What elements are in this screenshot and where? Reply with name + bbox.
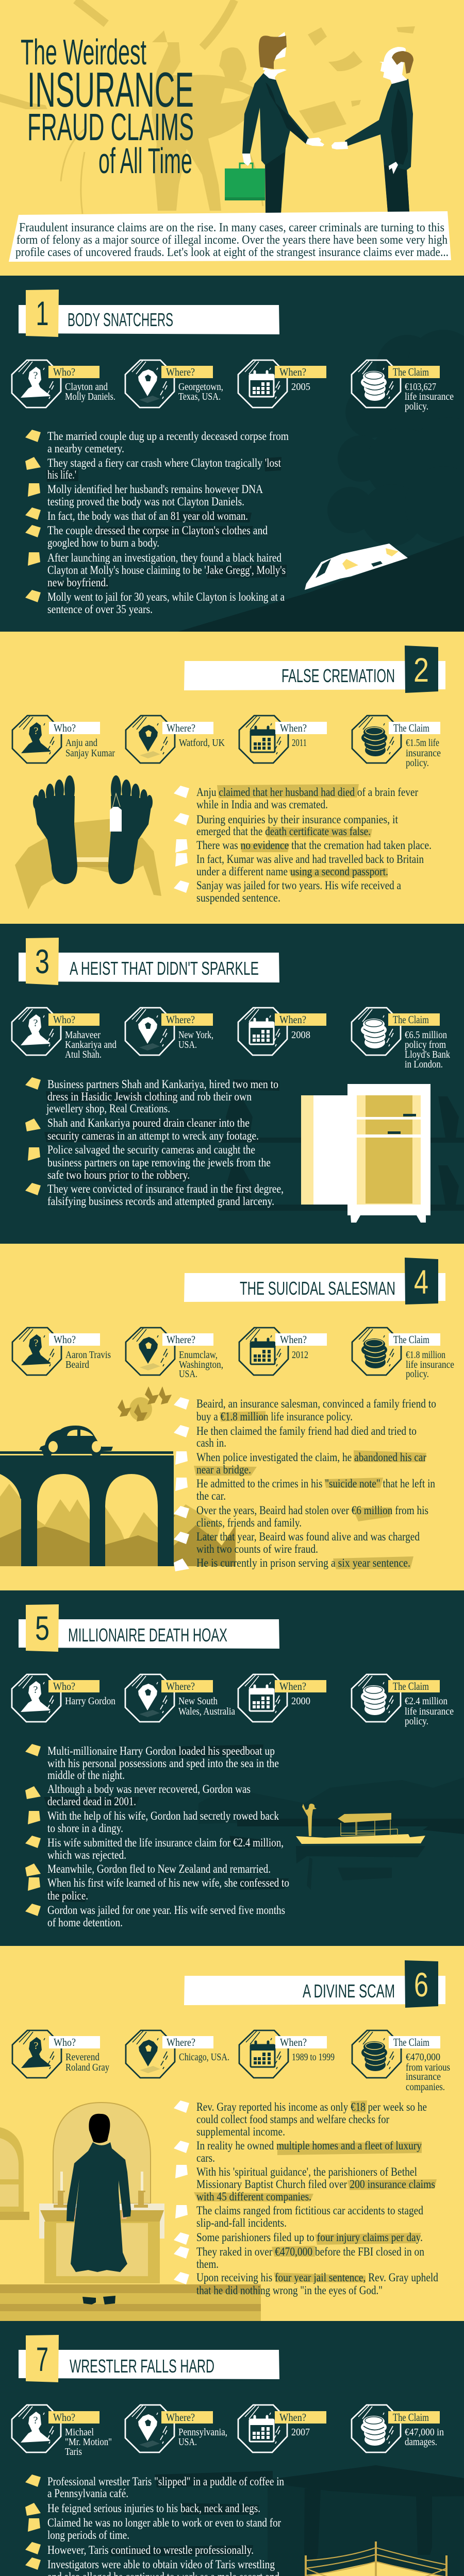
fact row: who where when claim: life insurance [405, 391, 454, 402]
section heading: BODY SNATCHERS [68, 309, 173, 330]
story bullets: However, Taris continued to wrestle professionally. [47, 2544, 254, 2556]
fact row: who where when claim: Watford, UK [179, 737, 225, 749]
story bullets: while in India and was cremated. [196, 798, 328, 811]
fact row: who where when claim: The Claim [393, 2411, 429, 2424]
fact row: who where when claim [12, 1008, 450, 1070]
story bullets: his life.' [47, 468, 76, 481]
fact row: who where when claim: When? [279, 366, 306, 378]
fact row: who where when claim: €6.5 million [405, 1029, 447, 1041]
story bullets: slip-and-fall incidents. [196, 2216, 287, 2229]
story bullets: declared dead in 2001. [47, 1795, 136, 1808]
story bullets: He is currently in prison serving a six year sentence. [196, 1556, 410, 1569]
story bullets: the car. [196, 1489, 226, 1502]
fact row: who where when claim: €47,000 in [405, 2427, 444, 2438]
fact row: who where when claim: The Claim [393, 722, 429, 734]
section heading [19, 1604, 279, 1652]
story bullets: sentence of over 35 years. [47, 603, 153, 616]
fact row: who where when claim: Who? [53, 366, 75, 378]
panel: 7 wrestler falls hard [0, 2321, 464, 2576]
fact row: who where when claim: 1989 to 1999 [292, 2052, 335, 2063]
intro text box [9, 211, 451, 262]
story bullets: Police salvaged the security cameras and caught the [47, 1143, 255, 1156]
fact row: who where when claim: 2012 [292, 1349, 308, 1361]
story bullets: with 45 different companies. [196, 2190, 311, 2203]
fact row: who where when claim: When? [279, 1013, 306, 1026]
fact row: who where when claim: Atul Shah. [65, 1049, 102, 1060]
fact row: who where when claim [12, 1328, 454, 1380]
story bullets [174, 784, 432, 904]
fact row: who where when claim: insurance [406, 2071, 441, 2082]
fact row: who where when claim: Where? [166, 2411, 195, 2424]
fact row: who where when claim: New South [178, 1696, 218, 1707]
story bullets: Professional wrestler Taris "slipped" in a puddle of coffee in [47, 2475, 284, 2488]
story bullets: security cameras in an attempt to wreck any footage. [47, 1129, 259, 1142]
fact row: who where when claim: Michael [65, 2427, 94, 2438]
section heading [19, 2335, 279, 2382]
fact row: who where when claim: Anju and [65, 737, 97, 749]
panel: hero header [0, 0, 464, 276]
fact row: who where when claim: Where? [166, 1680, 195, 1692]
fact row: who where when claim: "Mr. Motion" [65, 2436, 112, 2448]
story bullets: falsifying business records and attempted grand larceny. [47, 1195, 274, 1208]
story bullets: with his personal possessions and sped into the sea in the [47, 1757, 279, 1770]
story bullets: The married couple dug up a recently deceased corpse from [47, 430, 289, 443]
fact row: who where when claim: The Claim [393, 366, 429, 378]
fact row: who where when claim: When? [280, 1333, 307, 1346]
fact row: who where when claim: The Claim [393, 2036, 429, 2048]
story bullets: clients, friends and family. [196, 1516, 302, 1529]
section heading: 3 [35, 942, 49, 980]
fact row: who where when claim [12, 2405, 444, 2458]
story bullets [25, 1744, 289, 1929]
story bullets: With the help of his wife, Gordon had secretly rowed back [47, 1809, 279, 1822]
illustration: wrestling ring [268, 2465, 464, 2576]
fact row: who where when claim: Clayton and [65, 381, 108, 393]
panel: 4 the suicidal salesman [0, 1244, 464, 1590]
story bullets: Clayton at Molly's house claiming to be 'Jake Gregg', Molly's [47, 564, 286, 577]
fact row: who where when claim: Taris [65, 2446, 82, 2458]
fact row: who where when claim: from various [406, 2062, 450, 2073]
panel: 1 body snatchers [0, 276, 464, 632]
panel: 3 a heist that didn't sparkle [0, 924, 464, 1244]
story bullets: He then claimed the family friend had died and tried to [196, 1425, 417, 1437]
fact row: who where when claim: Beaird [65, 1359, 89, 1370]
story bullets: with two counts of wire fraud. [196, 1543, 318, 1555]
fact row: who where when claim: 2007 [291, 2427, 310, 2438]
fact row: who where when claim: New York, [178, 1029, 213, 1041]
story bullets: dress in Hasidic Jewish clothing and rob their own [47, 1090, 252, 1103]
fact row: who where when claim: USA. [178, 2436, 197, 2448]
fact row: who where when claim: Washington, [179, 1359, 223, 1370]
fact row: who where when claim: Pennsylvania, [178, 2427, 227, 2438]
story bullets: that he did nothing wrong "in the eyes of God." [196, 2284, 383, 2297]
story bullets: Molly identified her husband's remains however DNA [47, 483, 263, 496]
story bullets: In fact, Kumar was alive and had travelled back to Britain [196, 853, 424, 866]
section heading [184, 646, 445, 693]
panel: 6 a divine scam [0, 1946, 464, 2321]
fact row: who where when claim: Who? [54, 2036, 76, 2048]
fact row: who where when claim: ? [34, 2040, 39, 2052]
panel: 5 millionaire death hoax [0, 1590, 464, 1946]
section heading: 6 [414, 1965, 428, 2004]
fact row: who where when claim: ? [34, 1337, 39, 1349]
fact row: who where when claim: €103,627 [405, 381, 436, 393]
story bullets [25, 1077, 284, 1208]
fact row: who where when claim: Who? [54, 1333, 76, 1346]
title: The Weirdest [21, 32, 146, 72]
section heading: 1 [36, 294, 48, 332]
story bullets: Multi-millionaire Harry Gordon loaded his speedboat up [47, 1744, 275, 1757]
fact row: who where when claim: ? [34, 2415, 38, 2426]
fact row: who where when claim: insurance [406, 748, 441, 759]
title: of All Time [98, 141, 192, 181]
story bullets: In fact, the body was that of an 81 year old woman. [47, 510, 248, 522]
hero shadow illustration [0, 0, 415, 214]
story bullets: When police investigated the claim, he abandoned his car [196, 1451, 426, 1464]
section heading: WRESTLER FALLS HARD [70, 2355, 214, 2377]
fact row: who where when claim: Aaron Travis [65, 1349, 111, 1361]
section heading: A DIVINE SCAM [303, 1980, 395, 2002]
fact row: who where when claim: The Claim [393, 1013, 429, 1026]
illustration: priest at altar [0, 2103, 261, 2321]
story bullets: testing proved the body was not Clayton Daniels. [47, 495, 244, 508]
story bullets: In reality he owned multiple homes and a fleet of luxury [196, 2139, 422, 2152]
story bullets: Investigators were able to obtain video of Taris wrestling [47, 2558, 275, 2571]
fact row: who where when claim: Who? [54, 722, 76, 734]
fact row: who where when claim: life insurance [406, 1359, 454, 1370]
story bullets: They were convicted of insurance fraud in the first degree, [47, 1182, 284, 1195]
fact row: who where when claim: Where? [166, 1013, 195, 1026]
story bullets: They staged a fiery car crash where Clayton tragically 'lost [47, 456, 281, 469]
story bullets: emerged that the death certificate was false. [196, 825, 371, 838]
section heading [184, 1960, 445, 2008]
story bullets: googled how to burn a body. [47, 536, 159, 549]
fact row: who where when claim: 2005 [291, 381, 310, 393]
fact row: who where when claim [12, 716, 441, 769]
story bullets: Gordon was jailed for one year. His wife served five months [47, 1904, 285, 1917]
fact row: who where when claim: Where? [166, 366, 195, 378]
story bullets: jewellery shop, Real Creations. [46, 1102, 170, 1115]
fact row: who where when claim: €1.5m life [406, 737, 439, 749]
story bullets: of home detention. [47, 1916, 123, 1929]
title [21, 32, 194, 181]
fact row: who where when claim: damages. [405, 2436, 437, 2448]
story bullets: When his first wife learned of his new wife, she confessed to [47, 1876, 289, 1889]
story bullets: His wife submitted the life insurance claim for €2.4 million, [47, 1836, 284, 1849]
fact row: who where when claim: 2000 [291, 1696, 310, 1707]
illustration: car on bridge with mountains [0, 1386, 236, 1568]
fact row: who where when claim: Reverend [65, 2052, 100, 2063]
fact row: who where when claim [12, 2030, 450, 2093]
story bullets: Sanjay was jailed for two years. His wife received a [196, 879, 401, 892]
fact row: who where when claim: Who? [53, 1680, 75, 1692]
fact row: who where when claim [12, 1674, 454, 1727]
fact row: who where when claim: Wales, Australia [178, 1706, 235, 1717]
story bullets: safe two hours prior to the robbery. [47, 1168, 190, 1181]
story bullets [25, 2471, 284, 2576]
story bullets: Anju claimed that her husband had died of a brain fever [196, 786, 418, 799]
fact row: who where when claim: Where? [167, 1333, 195, 1346]
fact row: who where when claim: €2.4 million [405, 1696, 448, 1707]
fact row: who where when claim: The Claim [393, 1333, 429, 1346]
fact row: who where when claim: 2011 [292, 737, 307, 749]
fact row: who where when claim: Roland Gray [65, 2062, 109, 2073]
fact row: who where when claim: 2008 [291, 1029, 310, 1041]
illustration: boat on lake [198, 1777, 464, 1890]
story bullets: the police. [47, 1889, 88, 1902]
story bullets [174, 2100, 438, 2297]
story bullets: The claims ranged from fictitious car accidents to staged [196, 2204, 423, 2217]
fact row: who where when claim: policy from [405, 1039, 446, 1050]
section heading: FALSE CREMATION [281, 665, 395, 686]
fact row: who where when claim: Sanjay Kumar [65, 748, 115, 759]
fact row: who where when claim: companies. [406, 2081, 445, 2093]
story bullets: new boyfriend. [47, 576, 108, 589]
story bullets: business partners on tape removing the jewels from the [47, 1156, 271, 1169]
fact row: who where when claim: Enumclaw, [179, 1349, 218, 1361]
title: INSURANCE [27, 62, 194, 117]
story bullets: could collect food stamps and welfare checks for [196, 2113, 389, 2126]
fact row: who where when claim: USA. [178, 1039, 197, 1050]
story bullets: a Pennsylvania café. [47, 2487, 128, 2500]
story bullets: Molly went to jail for 30 years, while Clayton is looking at a [47, 590, 285, 603]
fact row: who where when claim: ? [34, 1018, 38, 1029]
fact row: who where when claim: Harry Gordon [65, 1696, 115, 1707]
story bullets: buy a €1.8 million life insurance policy. [196, 1410, 353, 1423]
illustration: feet with toe tag [15, 775, 161, 909]
fact row: who where when claim: life insurance [405, 1706, 454, 1717]
story bullets: cash in. [196, 1436, 226, 1449]
story bullets: During enquiries by their insurance companies, it [196, 813, 399, 826]
section heading: 5 [35, 1609, 49, 1647]
story bullets: Shah and Kankariya poured drain cleaner into the [47, 1116, 250, 1129]
fact row: who where when claim: The Claim [393, 1680, 429, 1692]
fact row: who where when claim: When? [280, 2036, 307, 2048]
fact row: who where when claim: When? [279, 1680, 306, 1692]
story bullets: The couple dressed the corpse in Clayton's clothes and [47, 524, 268, 537]
story bullets: them. [196, 2258, 219, 2270]
section heading [19, 290, 279, 337]
section heading [19, 938, 279, 985]
fact row: who where when claim: Molly Daniels. [65, 391, 115, 402]
story bullets: After launching an investigation, they found a black haired [47, 551, 281, 564]
story bullets: Meanwhile, Gordon fled to New Zealand and remarried. [47, 1862, 271, 1875]
story bullets: Later that year, Beaird was found alive and was charged [196, 1530, 420, 1543]
story bullets: to shore in a dingy. [47, 1822, 123, 1835]
story bullets: Some parishioners filed up to four injury claims per day. [196, 2231, 423, 2244]
story bullets: supplemental income. [196, 2125, 285, 2138]
fact row: who where when claim: €470,000 [406, 2052, 440, 2063]
fact row: who where when claim: ? [34, 1684, 38, 1696]
story bullets: With his 'spiritual guidance', the parishioners of Bethel [196, 2165, 417, 2178]
illustration: smoke and crashed car [178, 330, 464, 632]
fact row: who where when claim: Where? [167, 2036, 195, 2048]
fact row: who where when claim: When? [279, 2411, 306, 2424]
story bullets: cars. [196, 2151, 215, 2164]
fact row: who where when claim: policy. [406, 1368, 429, 1380]
fact row: who where when claim: ? [34, 725, 39, 737]
story bullets [174, 1397, 436, 1571]
fact row: who where when claim: policy. [405, 1716, 428, 1727]
fact row: who where when claim: Mahaveer [65, 1029, 101, 1041]
story bullets: a nearby cemetery. [47, 442, 124, 455]
section heading [184, 1258, 445, 1304]
fact row: who where when claim: Kankariya and [65, 1039, 117, 1050]
fact row: who where when claim: When? [280, 722, 307, 734]
fact row: who where when claim: Chicago, USA. [179, 2052, 229, 2063]
story bullets: long periods of time. [47, 2529, 129, 2541]
section heading: 4 [414, 1263, 428, 1301]
fact row: who where when claim: policy. [405, 401, 428, 412]
fact row: who where when claim [12, 360, 454, 412]
illustration: businessman shaking hands [332, 47, 413, 212]
fact row: who where when claim: policy. [406, 757, 429, 769]
fact row: who where when claim: USA. [179, 1368, 197, 1380]
story bullets: Although a body was never recovered, Gordon was [47, 1783, 251, 1795]
section heading: 2 [413, 651, 429, 689]
panel: 2 false cremation [0, 632, 464, 924]
section heading: 7 [36, 2340, 48, 2378]
fact row: who where when claim: Georgetown, [178, 381, 223, 393]
section heading: A HEIST THAT DIDN'T SPARKLE [70, 958, 259, 979]
story bullets: under a different name using a second passport. [196, 865, 388, 878]
story bullets: They raked in over €470,000 before the FBI closed in on [196, 2245, 424, 2258]
story bullets: Business partners Shah and Kankariya, hired two men to [47, 1078, 278, 1091]
story bullets: suspended sentence. [196, 891, 280, 904]
story bullets: near a bridge. [196, 1463, 251, 1476]
fact row: who where when claim: ? [34, 370, 38, 381]
fact row: who where when claim: Where? [167, 722, 195, 734]
illustration: businessman with briefcase [225, 32, 324, 213]
fact row: who where when claim: €1.8 million [406, 1349, 445, 1361]
fact row: who where when claim: Texas, USA. [178, 391, 221, 402]
section heading: MILLIONAIRE DEATH HOAX [68, 1624, 227, 1646]
story bullets: which was rejected. [47, 1849, 126, 1861]
fact row: who where when claim: Who? [53, 2411, 75, 2424]
fact row: who where when claim: in London. [405, 1059, 443, 1070]
story bullets: He feigned serious injuries to his back, neck and legs. [47, 2502, 260, 2515]
illustration: jewellery shop safe [219, 1084, 464, 1223]
story bullets: middle of the night. [47, 1769, 125, 1782]
fact row: who where when claim: Lloyd's Bank [405, 1049, 450, 1060]
title: FRAUD CLAIMS [27, 106, 194, 148]
story bullets [25, 430, 289, 616]
story bullets: Claimed he was no longer able to work or even to stand for [47, 2516, 281, 2529]
fact row: who where when claim: Who? [53, 1013, 75, 1026]
